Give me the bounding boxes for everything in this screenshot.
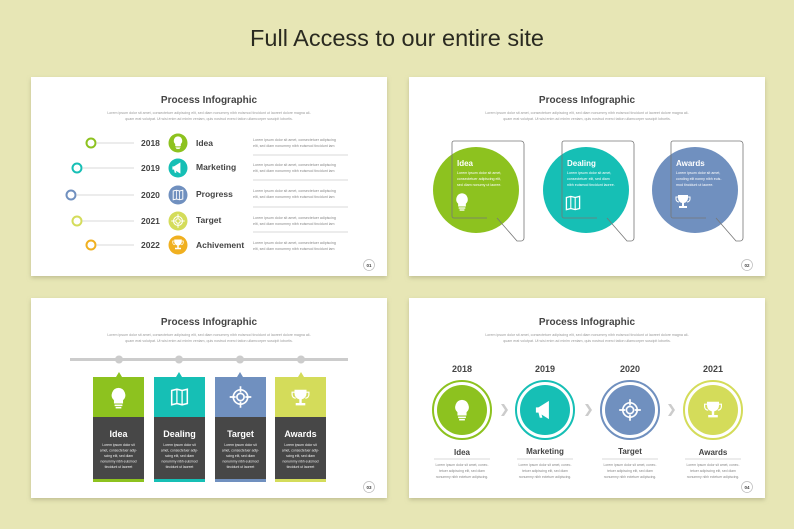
step 2021 Awards: nonummy nibh ectetuer adipiscing. xyxy=(687,475,739,479)
arrow xyxy=(668,404,675,416)
row 2020 xyxy=(66,186,348,207)
row 2020: Progress xyxy=(196,189,233,199)
row 2021: elit, sed diam nonummy nibh euismod tincidunt iam xyxy=(253,222,335,226)
card: Dealing: Lorem ipsum dolor sit amet, xyxy=(567,171,611,175)
card: Awards: conding elit nonny nibh euis- xyxy=(676,177,722,181)
row 2019 xyxy=(72,158,348,180)
step 2020 Target: nonummy nibh ectetuer adipiscing. xyxy=(604,475,656,479)
step 2019 Marketing: Lorem ipsum dolor sit amet, conec- xyxy=(519,463,571,467)
page number: 04 xyxy=(744,485,750,490)
card: Idea: Idea xyxy=(109,429,128,439)
page number: 03 xyxy=(366,485,372,490)
card: Awards: Lorem ipsum dolor sit amet, xyxy=(676,171,720,175)
intro text: quam erat volutpat. Ut wisi enim ad minim veniam, quis nostrud exerci tation ullamcorper suscipit lobortis. xyxy=(503,339,671,343)
step 2019 Marketing: Marketing xyxy=(526,447,564,456)
row 2022: 2022 xyxy=(141,240,160,250)
step 2020 Target: Target xyxy=(618,447,642,456)
row 2022 xyxy=(86,236,336,254)
step 2019 Marketing xyxy=(516,364,574,479)
row 2018 xyxy=(86,134,348,155)
card: Awards: Awards xyxy=(676,159,705,168)
card: Awards: Lorem ipsum dolor sit xyxy=(284,443,317,447)
intro text xyxy=(485,111,689,121)
card: Dealing: nibh euismod tincidunt laoree. xyxy=(567,183,615,187)
card: Awards: Awards xyxy=(284,429,317,439)
panel: vertical cards (03) xyxy=(31,298,387,498)
card: Dealing: nonummy nibh euismod xyxy=(162,460,198,464)
page number xyxy=(742,260,752,270)
intro text: quam erat volutpat. Ut wisi enim ad minim veniam, quis nostrud exerci tation ullamcorper suscipit lobortis. xyxy=(125,339,293,343)
page number xyxy=(364,482,374,492)
step 2021 Awards: Awards xyxy=(699,448,728,457)
heading: Process Infographic xyxy=(539,95,636,106)
intro text: Lorem ipsum dolor sit amet, consectetuer adipiscing elit, sed diam nonummy nibh euismod tincidunt ut laoreet dolore magna ali- xyxy=(107,111,311,115)
card: Dealing xyxy=(154,372,205,482)
card: Dealing: consectetuer elit, sed diam xyxy=(567,177,610,181)
card: Dealing: Dealing xyxy=(163,429,196,439)
panel: circles (02) xyxy=(409,77,765,276)
intro text: quam erat volutpat. Ut wisi enim ad minim veniam, quis nostrud exerci tation ullamcorper suscipit lobortis. xyxy=(125,117,293,121)
card: Idea: scing elit, sed diam xyxy=(104,454,133,458)
row 2020: elit, sed diam nonummy nibh euismod tincidunt iam xyxy=(253,195,335,199)
card: Awards xyxy=(275,372,326,482)
card: Dealing: scing elit, sed diam xyxy=(165,454,194,458)
intro text xyxy=(107,111,311,121)
title: Full Access to our entire site xyxy=(250,25,544,51)
card: Idea: nonummy nibh euismod xyxy=(100,460,137,464)
card: Awards xyxy=(652,141,743,241)
row 2018: Idea xyxy=(196,138,213,148)
page number: 01 xyxy=(366,263,372,268)
row 2021 xyxy=(72,212,348,232)
timeline bar xyxy=(70,356,348,364)
card: Idea: sed diam nonumy ut laoree. xyxy=(457,183,501,187)
step 2019 Marketing: tetuer adipiscing elit, sed diam xyxy=(522,469,568,473)
heading: Process Infographic xyxy=(161,317,258,328)
step 2021 Awards xyxy=(684,364,742,479)
card: Idea: tincidunt ut laoreet xyxy=(105,465,132,469)
row 2021: 2021 xyxy=(141,216,160,226)
row 2019: Lorem ipsum dolor sit amet, consectetuer adipiscing xyxy=(253,163,336,167)
row 2019: 2019 xyxy=(141,163,160,173)
step 2021 Awards: 2021 xyxy=(703,364,723,374)
intro text xyxy=(107,333,311,343)
row 2021: Lorem ipsum dolor sit amet, consectetuer adipiscing xyxy=(253,216,336,220)
step 2020 Target: Lorem ipsum dolor sit amet, conec- xyxy=(604,463,656,467)
intro text xyxy=(485,333,689,343)
heading: Process Infographic xyxy=(539,317,636,328)
card: Dealing: amet, consectetuer adip- xyxy=(161,448,198,452)
step 2019 Marketing: 2019 xyxy=(535,364,555,374)
card: Dealing: tincidunt ut laoreet xyxy=(166,465,193,469)
page number: 02 xyxy=(744,263,750,268)
card: Target: scing elit, sed diam xyxy=(226,454,255,458)
panel: timeline list (01) xyxy=(31,77,387,276)
intro text: Lorem ipsum dolor sit amet, consectetuer adipiscing elit, sed diam nonummy nibh euismod tincidunt ut laoreet dolore magna ali- xyxy=(485,111,689,115)
row 2022: Achivement xyxy=(196,240,244,250)
card: Idea: consectetuer adipiscing elit, xyxy=(457,177,501,181)
step 2018 Idea: tetuer adipiscing elit, sed diam xyxy=(439,469,485,473)
row 2020: 2020 xyxy=(141,190,160,200)
card: Idea: Idea xyxy=(457,159,474,168)
panel: circle process (04) xyxy=(409,298,765,498)
row 2019: elit, sed diam nonummy nibh euismod tincidunt iam xyxy=(253,169,335,173)
card: Target: Target xyxy=(227,429,254,439)
card: Dealing: Lorem ipsum dolor sit xyxy=(163,443,196,447)
card: Awards: mod tincidunt ut laoree. xyxy=(676,183,713,187)
step 2018 Idea: Lorem ipsum dolor sit amet, conec- xyxy=(436,463,488,467)
card: Target xyxy=(215,372,266,482)
arrow xyxy=(501,404,508,416)
card: Target: tincidunt ut laoreet xyxy=(227,465,254,469)
card: Idea xyxy=(433,141,524,241)
card: Idea: amet, consectetuer adip- xyxy=(100,448,137,452)
card: Dealing: Dealing xyxy=(567,159,596,168)
intro text: quam erat volutpat. Ut wisi enim ad minim veniam, quis nostrud exerci tation ullamcorper suscipit lobortis. xyxy=(503,117,671,121)
row 2019: Marketing xyxy=(196,162,236,172)
card: Awards: tincidunt ut laoreet xyxy=(287,465,314,469)
row 2018: 2018 xyxy=(141,138,160,148)
intro text: Lorem ipsum dolor sit amet, consectetuer adipiscing elit, sed diam nonummy nibh euismod tincidunt ut laoreet dolore magna ali- xyxy=(107,333,311,337)
row 2018: Lorem ipsum dolor sit amet, consectetuer adipiscing xyxy=(253,138,336,142)
step 2020 Target xyxy=(601,364,659,479)
heading: Process Infographic xyxy=(161,95,258,106)
step 2019 Marketing: nonummy nibh ectetuer adipiscing. xyxy=(519,475,571,479)
row 2022: Lorem ipsum dolor sit amet, consectetuer adipiscing xyxy=(253,241,336,245)
intro text: Lorem ipsum dolor sit amet, consectetuer adipiscing elit, sed diam nonummy nibh euismod tincidunt ut laoreet dolore magna ali- xyxy=(485,333,689,337)
row 2018: elit, sed diam nonummy nibh euismod tincidunt iam xyxy=(253,144,335,148)
step 2020 Target: tetuer adipiscing elit, sed diam xyxy=(607,469,653,473)
step 2020 Target: 2020 xyxy=(620,364,640,374)
card: Target: nonummy nibh euismod xyxy=(222,460,259,464)
row 2020: Lorem ipsum dolor sit amet, consectetuer adipiscing xyxy=(253,189,336,193)
row 2022: elit, sed diam nonummy nibh euismod tincidunt iam xyxy=(253,247,335,251)
card: Awards: nonummy nibh euismod xyxy=(282,460,319,464)
step 2018 Idea: 2018 xyxy=(452,364,472,374)
card: Idea: Lorem ipsum dolor sit xyxy=(102,443,135,447)
step 2021 Awards: tetuer adipiscing elit, sed diam xyxy=(690,469,736,473)
step 2021 Awards: Lorem ipsum dolor sit amet, conec- xyxy=(687,463,739,467)
row 2021: Target xyxy=(196,215,222,225)
card: Idea xyxy=(93,372,144,482)
card: Target: Lorem ipsum dolor sit xyxy=(224,443,257,447)
card: Idea: Lorem ipsum dolor sit amet, xyxy=(457,171,501,175)
step 2018 Idea: Idea xyxy=(454,448,471,457)
card: Awards: scing elit, sed diam xyxy=(286,454,315,458)
card: Dealing xyxy=(543,141,634,241)
page number xyxy=(742,482,752,492)
card: Target: amet, consectetuer adip- xyxy=(222,448,259,452)
page number xyxy=(364,260,374,270)
card: Awards: amet, consectetuer adip- xyxy=(282,448,319,452)
arrow xyxy=(585,404,592,416)
step 2018 Idea xyxy=(433,364,491,479)
step 2018 Idea: nonummy nibh ectetuer adipiscing. xyxy=(436,475,488,479)
